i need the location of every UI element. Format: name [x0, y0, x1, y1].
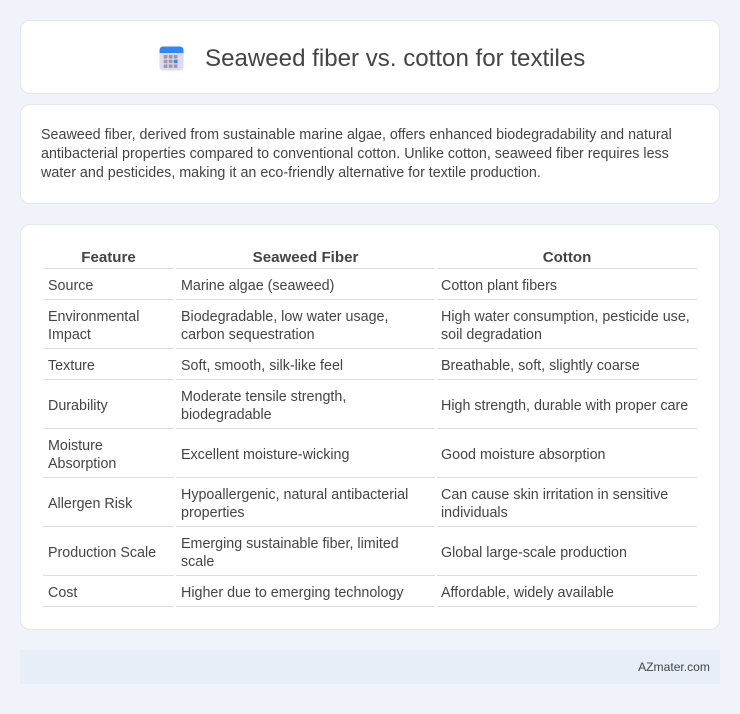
row: Texture: Texture: [48, 358, 95, 374]
row: Moisture Absorption: Moisture: [48, 438, 103, 454]
row: Texture: Breathable, soft, slightly coarse: [441, 358, 640, 374]
row: Production Scale: Production Scale: [48, 545, 156, 561]
intro paragraph: Seaweed fiber, derived from sustainable marine algae, offers enhanced biodegradability and natural: [41, 127, 672, 143]
row: Cost: Higher due to emerging technology: [181, 585, 404, 601]
intro paragraph: water and pesticides, making it an eco-friendly alternative for textile production.: [41, 165, 541, 181]
row: Environmental Impact: Biodegradable, low water usage,: [181, 309, 388, 325]
row: Allergen Risk: properties: [181, 505, 245, 521]
header: Feature: Feature: [81, 249, 136, 266]
footer bar: [20, 650, 720, 684]
row: Environmental Impact: Impact: [48, 327, 91, 343]
row: Source: [48, 278, 557, 294]
row: Cost: Affordable, widely available: [441, 585, 614, 601]
table panel: [20, 224, 720, 630]
header: Seaweed Fiber: Seaweed Fiber: [253, 249, 358, 266]
row: Durability: High strength, durable with proper care: [441, 398, 688, 414]
row: Production Scale: Global large-scale production: [441, 545, 627, 561]
row: Durability: biodegradable: [181, 407, 272, 423]
row: Durability: [48, 389, 688, 423]
row: Texture: Soft, smooth, silk-like feel: [181, 358, 343, 374]
title card: [20, 20, 720, 94]
row: Environmental Impact: soil degradation: [441, 327, 542, 343]
intro paragraph: [41, 127, 672, 181]
intro paragraph: antibacterial properties compared to conventional cotton. Unlike cotton, seaweed fiber requires less: [41, 146, 669, 162]
icon: calendar: [160, 46, 184, 70]
row: Production Scale: Emerging sustainable fiber, limited: [181, 536, 399, 552]
row: Allergen Risk: [48, 487, 668, 521]
header: Cotton: Cotton: [543, 249, 591, 266]
row: Allergen Risk: Hypoallergenic, natural antibacterial: [181, 487, 408, 503]
row: Cost: [48, 585, 614, 601]
title: Seaweed fiber vs. cotton for textiles: [205, 45, 585, 72]
row: Environmental Impact: carbon sequestration: [181, 327, 315, 343]
row: Moisture Absorption: Good moisture absorption: [441, 447, 606, 463]
row: Production Scale: [48, 536, 627, 570]
row: Environmental Impact: Environmental: [48, 309, 139, 325]
row: Allergen Risk: Allergen Risk: [48, 496, 132, 512]
footer credit: AZmater.com: [638, 660, 710, 674]
row: Moisture Absorption: Excellent moisture-wicking: [181, 447, 349, 463]
row: Moisture Absorption: [48, 438, 606, 472]
row: Texture: [48, 358, 640, 374]
row: Cost: Cost: [48, 585, 77, 601]
row: Durability: Durability: [48, 398, 108, 414]
row: Durability: Moderate tensile strength,: [181, 389, 346, 405]
row: Source: Marine algae (seaweed): [181, 278, 334, 294]
row: Source: Cotton plant fibers: [441, 278, 557, 294]
row: Allergen Risk: Can cause skin irritation in sensitive: [441, 487, 668, 503]
row: Source: Source: [48, 278, 93, 294]
row: Environmental Impact: High water consumption, pesticide use,: [441, 309, 690, 325]
row: Environmental Impact: [48, 309, 690, 343]
row: Production Scale: scale: [181, 554, 214, 570]
row: Allergen Risk: individuals: [441, 505, 508, 521]
row: Moisture Absorption: Absorption: [48, 456, 116, 472]
intro text card: [20, 104, 720, 204]
